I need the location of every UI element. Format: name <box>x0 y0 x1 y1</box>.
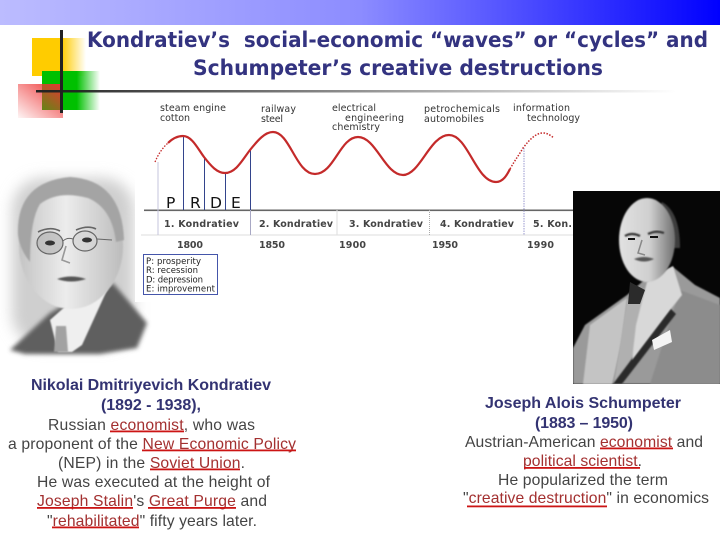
caption: Schumpeter biography: (1883 – 1950) <box>535 415 633 432</box>
innovation labels: technology <box>527 113 580 124</box>
phase letters: D <box>210 194 222 212</box>
legend box: R: recession <box>146 266 198 276</box>
link underlines left <box>37 430 296 528</box>
innovation labels: information <box>513 103 570 114</box>
portrait: Kondratiev <box>10 177 147 354</box>
year labels: 1800 <box>177 240 203 251</box>
cycle labels <box>164 219 572 230</box>
caption: Kondratiev biography: "rehabilitated" fifty years later. <box>47 513 257 530</box>
legend box: P: prosperity <box>146 257 201 267</box>
link underlines right <box>467 448 673 507</box>
header gradient band <box>0 0 720 25</box>
innovation labels: railway <box>261 104 296 115</box>
caption: Kondratiev biography: Joseph Stalin's Great Purge and <box>37 493 267 510</box>
cycle labels: 3. Kondratiev <box>349 219 424 230</box>
title: Schumpeter’s creative destructions <box>193 56 603 81</box>
caption: Kondratiev biography <box>8 377 296 530</box>
year labels: 1950 <box>432 240 458 251</box>
cycle labels: 2. Kondratiev <box>259 219 334 230</box>
phase letters <box>166 194 241 212</box>
caption: Kondratiev biography: a proponent of the New Economic Policy <box>8 436 296 453</box>
innovation labels: engineering <box>345 113 404 124</box>
chart: Kondratiev waves <box>141 103 580 294</box>
caption: Schumpeter biography: Austrian-American economist and <box>465 434 703 451</box>
innovation labels: chemistry <box>332 122 380 133</box>
cycle labels: 5. Kon. <box>533 219 572 230</box>
cycle labels: 4. Kondratiev <box>440 219 515 230</box>
decorative corner squares and rule <box>18 30 676 118</box>
year labels: 1850 <box>259 240 285 251</box>
innovation labels: automobiles <box>424 114 484 125</box>
caption: Kondratiev biography: Nikolai Dmitriyevich Kondratiev <box>31 377 271 394</box>
innovation labels: steam engine <box>160 103 226 114</box>
title <box>87 28 708 81</box>
innovation labels: electrical <box>332 103 376 114</box>
caption: Kondratiev biography: (1892 - 1938), <box>101 397 201 414</box>
portrait: Schumpeter <box>573 191 720 384</box>
year labels: 1990 <box>527 240 554 251</box>
innovation labels: steel <box>261 114 283 125</box>
caption: Schumpeter biography: Joseph Alois Schumpeter <box>485 395 681 412</box>
legend box: E: improvement <box>146 284 216 294</box>
year labels: 1900 <box>339 240 366 251</box>
caption: Schumpeter biography: He popularized the term <box>498 472 668 489</box>
phase letters: P <box>166 194 175 212</box>
innovation labels <box>160 103 580 133</box>
year labels <box>177 240 554 251</box>
innovation labels: petrochemicals <box>424 104 500 115</box>
white chart backing <box>135 96 575 302</box>
wave curve <box>155 132 554 182</box>
caption: Schumpeter biography: "creative destruction" in economics <box>463 490 709 507</box>
caption: Kondratiev biography: Russian economist, who was <box>48 417 255 434</box>
phase letters: R <box>190 194 201 212</box>
cycle labels: 1. Kondratiev <box>164 219 240 230</box>
legend box <box>144 254 218 294</box>
phase dividers <box>158 136 524 235</box>
caption: Kondratiev biography: He was executed at the height of <box>37 474 271 491</box>
caption: Schumpeter biography <box>463 395 709 507</box>
caption: Schumpeter biography: political scientist. <box>523 453 642 470</box>
legend box: D: depression <box>146 276 203 286</box>
caption: Kondratiev biography: (NEP) in the Soviet Union. <box>58 455 245 472</box>
phase letters: E <box>231 194 241 212</box>
innovation labels: cotton <box>160 113 190 124</box>
chart baseline axes <box>141 210 574 236</box>
